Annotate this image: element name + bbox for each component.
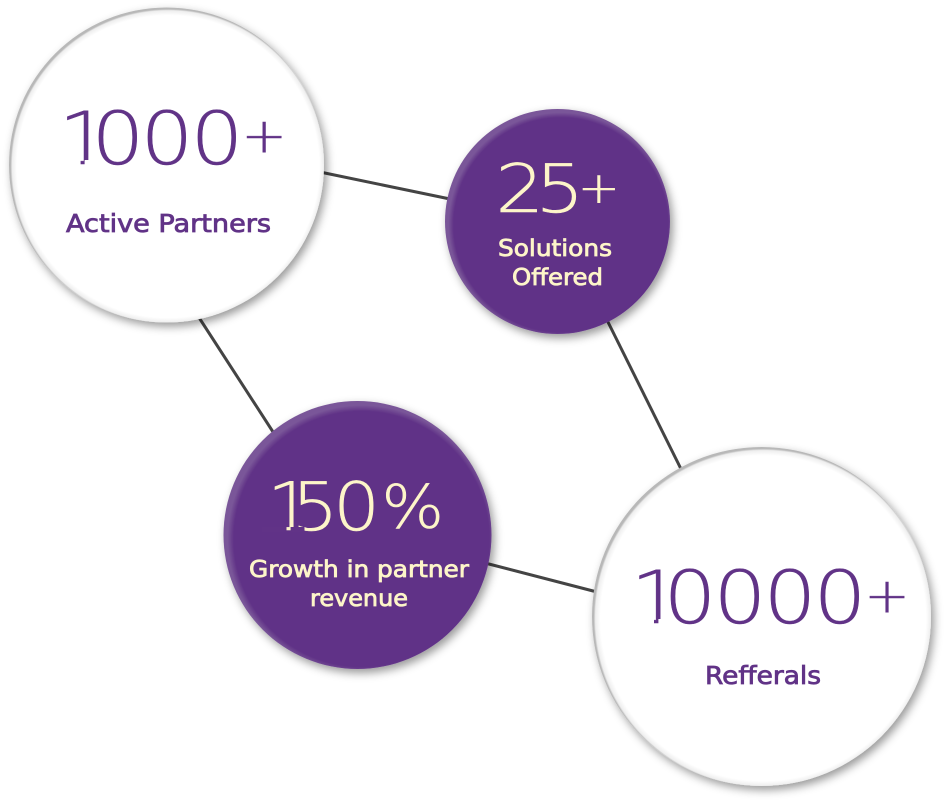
circle: Growth in partner revenue bbox=[224, 401, 492, 669]
circle: Solutions Offered bbox=[445, 109, 670, 334]
stat: 25+: 25 bbox=[495, 151, 584, 229]
connector: Active Partners to Solutions Offered bbox=[320, 172, 450, 199]
connector lines bbox=[198, 172, 682, 592]
circle: Active Partners bbox=[9, 8, 324, 322]
label: Solutions Offered bbox=[498, 234, 612, 291]
connector: Solutions Offered to Refferals bbox=[606, 318, 682, 471]
label: Growth in partner revenue bbox=[249, 555, 469, 612]
connector: Active Partners to Growth in partner revenue bbox=[198, 316, 275, 435]
panel: Refferals bbox=[592, 447, 931, 786]
stat: 25+: + bbox=[578, 163, 620, 214]
label: Solutions Offered: Solutions bbox=[498, 234, 612, 262]
stat: 1000+: + bbox=[241, 108, 287, 164]
label: Growth in partner revenue: revenue bbox=[310, 584, 408, 612]
stat: 150%: 150 bbox=[267, 468, 380, 546]
label: Growth in partner revenue: Growth in partner bbox=[249, 555, 469, 583]
label: Solutions Offered: Offered bbox=[512, 263, 603, 291]
stat: 10000+: + bbox=[864, 568, 910, 624]
circle: Refferals bbox=[592, 447, 931, 786]
stat: 150%: % bbox=[381, 471, 444, 542]
label: Refferals: Refferals bbox=[705, 661, 821, 690]
panel: Solutions Offered bbox=[445, 109, 670, 334]
label: Active Partners: Active Partners bbox=[66, 209, 271, 238]
stat: 1000+: 1000 bbox=[58, 97, 243, 182]
stat: 10000+: 10000 bbox=[630, 556, 866, 641]
panel: Growth in partner revenue bbox=[224, 401, 492, 669]
connector: Growth in partner revenue to Refferals bbox=[485, 563, 597, 592]
panel: Active Partners bbox=[9, 8, 324, 322]
